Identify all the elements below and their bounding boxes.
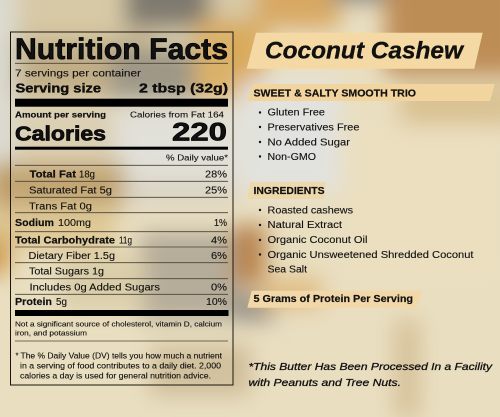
- bullet list: ingredients: Organic Unsweetened Shredded Coconut: [268, 250, 474, 261]
- row: trans fat: Trans Fat 0g: [29, 201, 92, 212]
- heading band: ingredients: INGREDIENTS: [254, 186, 325, 197]
- heading band: sweet and salty smooth trio: [247, 84, 495, 101]
- allergen note: [248, 361, 493, 389]
- row: total fat: Total Fat: [30, 169, 77, 180]
- bullet list: product claims: Gluten Free: [268, 108, 325, 119]
- row: saturated fat: 25%: [205, 185, 227, 196]
- row: protein: [15, 297, 227, 308]
- row: protein: 10%: [206, 297, 227, 308]
- note: not a significant source: Not a significant source of cholesterol, vitamin D, calcium: [15, 322, 222, 329]
- daily value header: % Daily value*: [166, 153, 229, 163]
- amount per serving row: Calories from Fat 164: [130, 110, 224, 120]
- note: not a significant source: iron, and potassium: [15, 331, 87, 338]
- footnote: daily value explanation: The % Daily Value (DV) tells you how much a nutrient: [20, 351, 223, 360]
- bullet list: ingredients: [259, 205, 474, 276]
- row: sodium: 100mg: [58, 218, 91, 229]
- bullet list: product claims: Non-GMO: [268, 152, 316, 163]
- serving size row: [16, 82, 228, 96]
- panel: nutrition facts label: [10, 32, 233, 385]
- row: dietary fiber: 6%: [211, 251, 227, 262]
- title banner: Coconut Cashew: Coconut Cashew: [265, 37, 464, 64]
- serving size row: 2 tbsp (32g): [139, 82, 228, 96]
- heading: Nutrition Facts: Nutrition Facts: [15, 33, 228, 66]
- footnote: daily value explanation: calories a day is used for general nutrition advice.: [20, 372, 211, 381]
- calories row: 220: [172, 119, 227, 147]
- callout band: protein per serving: 5 Grams of Protein Per Serving: [254, 294, 413, 305]
- calories row: [15, 119, 227, 147]
- footnote: daily value explanation: [16, 351, 223, 381]
- bullet list: product claims: No Added Sugar: [268, 137, 351, 148]
- heading band: sweet and salty smooth trio: SWEET & SALTY SMOOTH TRIO: [254, 89, 416, 100]
- bullet list: ingredients: Natural Extract: [268, 220, 342, 231]
- row: protein: 5g: [56, 297, 67, 308]
- row: total fat: 18g: [79, 169, 95, 180]
- callout band: protein per serving: [247, 291, 422, 308]
- bullet list: product claims: [259, 108, 360, 163]
- note: not a significant source: [15, 322, 222, 338]
- row: total fat: [30, 169, 227, 180]
- row: dietary fiber: Dietary Fiber 1.5g: [28, 251, 115, 262]
- row: sodium: Sodium: [15, 218, 54, 229]
- bullet list: ingredients: Roasted cashews: [268, 205, 353, 216]
- row: sodium: 1%: [214, 218, 227, 229]
- footnote: daily value explanation: in a serving of food contributes to a daily diet. 2,000: [20, 362, 222, 371]
- row: total carbohydrate: 4%: [211, 235, 227, 246]
- bullet list: product claims: Preservatives Free: [268, 122, 360, 133]
- row: protein: Protein: [15, 297, 52, 308]
- heading band: ingredients: [247, 182, 326, 199]
- allergen note: *This Butter Has Been Processed In a Facility: [248, 361, 493, 373]
- serving size row: Serving size: [16, 82, 101, 96]
- row: total carbohydrate: Total Carbohydrate: [15, 235, 115, 246]
- row: total fat: 28%: [205, 169, 227, 180]
- bullet list: ingredients: Sea Salt: [268, 265, 307, 276]
- row: total sugars: Total Sugars 1g: [29, 267, 104, 278]
- row: added sugars: [30, 283, 227, 294]
- row: added sugars: 0%: [211, 283, 227, 294]
- row: saturated fat: Saturated Fat 5g: [29, 185, 112, 196]
- footnote: daily value explanation: *: [16, 351, 19, 360]
- row: sodium: [15, 218, 227, 229]
- calories row: Calories: [15, 123, 106, 146]
- row: total carbohydrate: 11g: [119, 235, 132, 246]
- row: added sugars: Includes 0g Added Sugars: [30, 283, 160, 294]
- row: total carbohydrate: [15, 235, 227, 246]
- amount per serving row: [15, 110, 224, 120]
- title banner: Coconut Cashew: [247, 33, 483, 69]
- row: saturated fat: [29, 185, 227, 196]
- bullet list: ingredients: Organic Coconut Oil: [268, 235, 368, 246]
- row: dietary fiber: [28, 251, 227, 262]
- servings per container: 7 servings per container: [15, 69, 142, 80]
- allergen note: with Peanuts and Tree Nuts.: [248, 377, 401, 389]
- amount per serving row: Amount per serving: [15, 110, 106, 120]
